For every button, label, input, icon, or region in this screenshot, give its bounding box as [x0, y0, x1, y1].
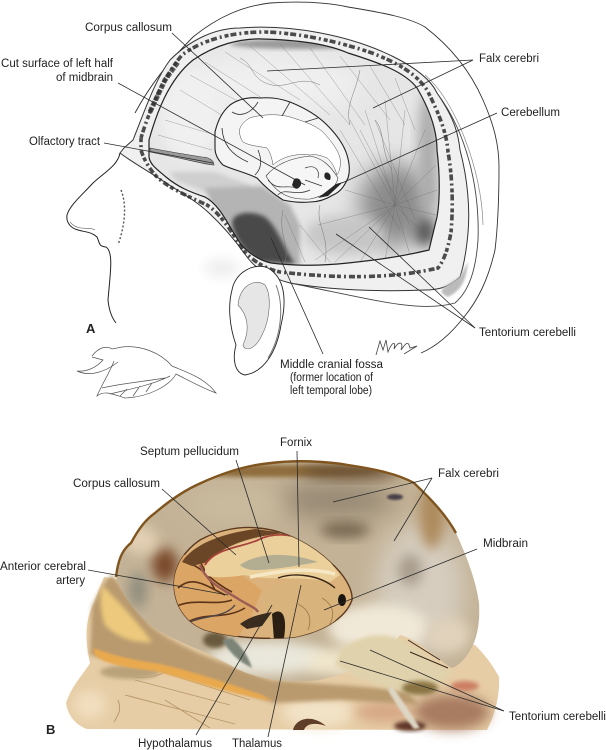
face profile: [67, 153, 120, 323]
sinus opening below notch: [222, 638, 252, 668]
labels panel A: (former location of: [290, 372, 374, 384]
brain gyri: [170, 555, 262, 640]
face and neck skin: [66, 577, 499, 730]
labels panel B: Septum pellucidum: [140, 446, 239, 458]
labels panel A: A: [86, 321, 96, 336]
labels panel B: Corpus callosum: [73, 478, 160, 490]
dural fibres: [158, 44, 437, 262]
tentorium cerebelli membrane: [335, 635, 455, 695]
brainstem and cerebellum: [266, 156, 338, 199]
anterior floor of skull: [172, 171, 248, 192]
leader lines panel B: [88, 451, 504, 737]
labels panel B: B: [46, 722, 55, 737]
dural cavity (falx): [150, 40, 439, 264]
labels panel A: Falx cerebri: [479, 53, 539, 65]
labels panel A: Cerebellum: [501, 107, 560, 119]
labels panel B: Anterior cerebral: [0, 561, 86, 573]
brow and nose shading: [118, 190, 125, 245]
middle cranial fossa shading: [232, 213, 295, 264]
labels panel B: Fornix: [280, 437, 312, 449]
scalp fold band: [120, 27, 469, 291]
septum pellucidum: [240, 555, 318, 570]
labels panel A: left temporal lobe): [290, 385, 372, 397]
labels panel A: of midbrain: [56, 72, 113, 84]
leader lines panel A: [104, 33, 497, 354]
olfactory tract: [150, 148, 214, 165]
labels panel B: Hypothalamus: [138, 738, 212, 750]
icon: dove outline: [77, 347, 216, 398]
labels panel A: Middle cranial fossa: [280, 359, 384, 371]
nostril/ear shadow: [293, 719, 326, 730]
labels panel A: Tentorium cerebelli: [479, 327, 576, 339]
labels panel B: Midbrain: [483, 538, 528, 550]
corpus callosum white band: [240, 115, 340, 175]
labels panel B: Tentorium cerebelli: [509, 711, 606, 723]
brown tissue band: [90, 575, 420, 705]
tentorial notch with brain section: [215, 98, 349, 202]
yellow fat band: [93, 648, 272, 701]
tentorial notch with brain: [174, 528, 352, 638]
skin wrinkles: [112, 668, 250, 728]
panel B: dissection photograph: [66, 455, 499, 731]
labels panel B: artery: [56, 575, 85, 587]
labels panel B: Thalamus: [232, 738, 282, 750]
labels panel A: Corpus callosum: [85, 22, 172, 34]
labels panel B: Falx cerebri: [438, 468, 499, 480]
artist signature: [376, 340, 417, 355]
labels panel A: [1, 22, 576, 397]
dark recess above corpus callosum: [182, 529, 285, 566]
labels panel B: [0, 437, 606, 750]
outer fold of scalp on right: [290, 93, 478, 306]
labels panel A: Olfactory tract: [29, 136, 101, 148]
icon: ear: [230, 266, 284, 375]
falx cerebri membrane: [110, 455, 485, 690]
skull diploe speckle: [141, 32, 452, 277]
arteries: [205, 535, 305, 565]
scalp outer outline: [135, 2, 499, 353]
panel A: sagittal head drawing: [67, 2, 499, 398]
thalamus / midbrain: [270, 618, 337, 638]
labels panel A: Cut surface of left half: [1, 58, 114, 70]
